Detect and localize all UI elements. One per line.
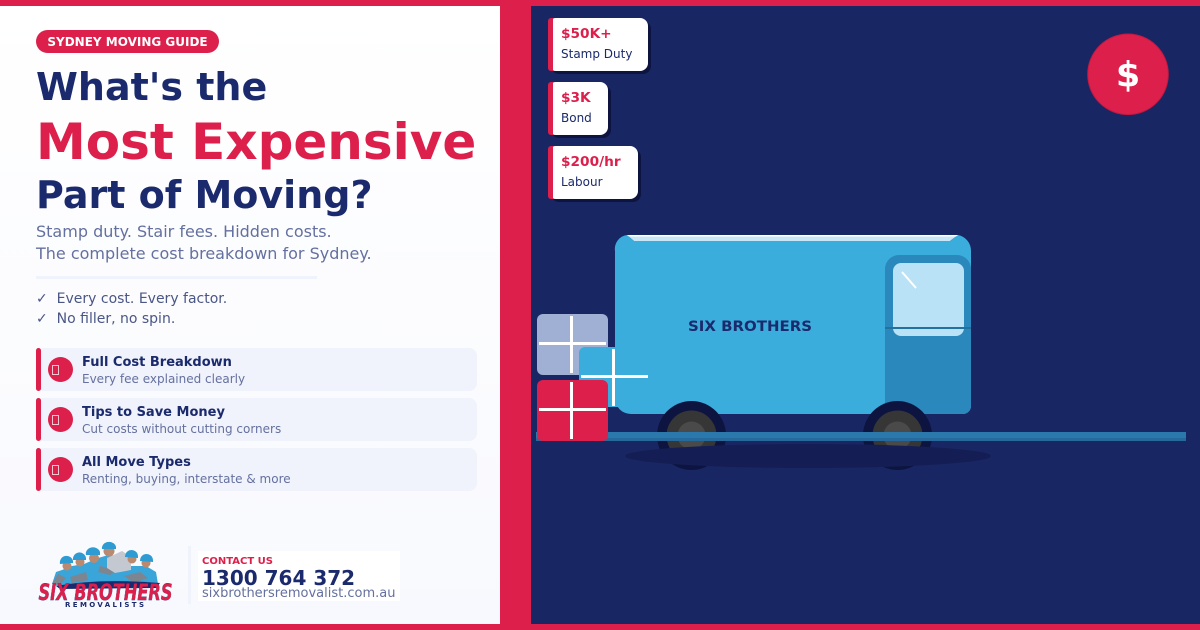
right panel: [531, 6, 1200, 624]
truck body: SIX BROTHERS: [688, 319, 812, 335]
feature: all move types: All Move Types: [82, 455, 191, 470]
cost card: stamp duty: [548, 18, 648, 71]
feature: tips to save money: Cut costs without cutting corners: [82, 422, 281, 436]
truck illustration: [536, 235, 1186, 470]
wheel: rear: [657, 401, 726, 470]
title line 1: What's the: [36, 65, 267, 109]
cost card: stamp duty: $50K+: [561, 26, 612, 42]
cost card: labour: Labour: [561, 175, 603, 189]
feature: tips to save money: Tips to Save Money: [82, 405, 225, 420]
left panel: [0, 6, 500, 624]
checklist: [36, 291, 227, 327]
cost card: stamp duty: Stamp Duty: [561, 47, 632, 61]
feature: all move types: [36, 448, 477, 491]
checklist: ✓ No filler, no spin.: [36, 311, 175, 327]
subtitle: [36, 222, 372, 263]
badge: SYDNEY MOVING GUIDE: [47, 35, 208, 49]
feature: full cost breakdown: Every fee explained clearly: [82, 372, 245, 386]
ground shadow: [625, 444, 991, 468]
cost card: bond: [548, 82, 608, 135]
road: [536, 432, 1186, 441]
subtitle: The complete cost breakdown for Sydney.: [36, 244, 372, 263]
feature: tips to save money: [36, 398, 477, 441]
box: grey: [537, 314, 608, 375]
feature: all move types: Renting, buying, interstate & more: [82, 472, 291, 486]
truck body: [615, 235, 971, 414]
title line 2: Most Expensive: [36, 113, 476, 171]
cost card: labour: $200/hr: [561, 154, 621, 170]
contact block: sixbrothersremovalist.com.au: [202, 586, 395, 601]
feature: full cost breakdown: Full Cost Breakdown: [82, 355, 232, 370]
cost card: bond: $3K: [561, 90, 591, 106]
contact block: CONTACT US: [202, 556, 273, 567]
logo: [38, 542, 172, 609]
contact block: [198, 551, 400, 601]
dollar coin: [1087, 34, 1169, 116]
dollar coin: $: [1116, 56, 1140, 96]
badge: [36, 30, 219, 53]
subtitle: Stamp duty. Stair fees. Hidden costs.: [36, 222, 332, 241]
checklist: ✓ Every cost. Every factor.: [36, 291, 227, 307]
wheel: front: [863, 401, 932, 470]
cost card: labour: [548, 146, 638, 199]
contact divider: [188, 546, 191, 604]
box: red: [537, 380, 608, 441]
box: blue: [579, 347, 650, 407]
cost card: bond: Bond: [561, 111, 592, 125]
contact block: 1300 764 372: [202, 566, 355, 590]
title line 3: Part of Moving?: [36, 173, 372, 217]
divider: [36, 276, 317, 279]
logo: REMOVALISTS: [65, 601, 144, 609]
feature: full cost breakdown: [36, 348, 477, 391]
